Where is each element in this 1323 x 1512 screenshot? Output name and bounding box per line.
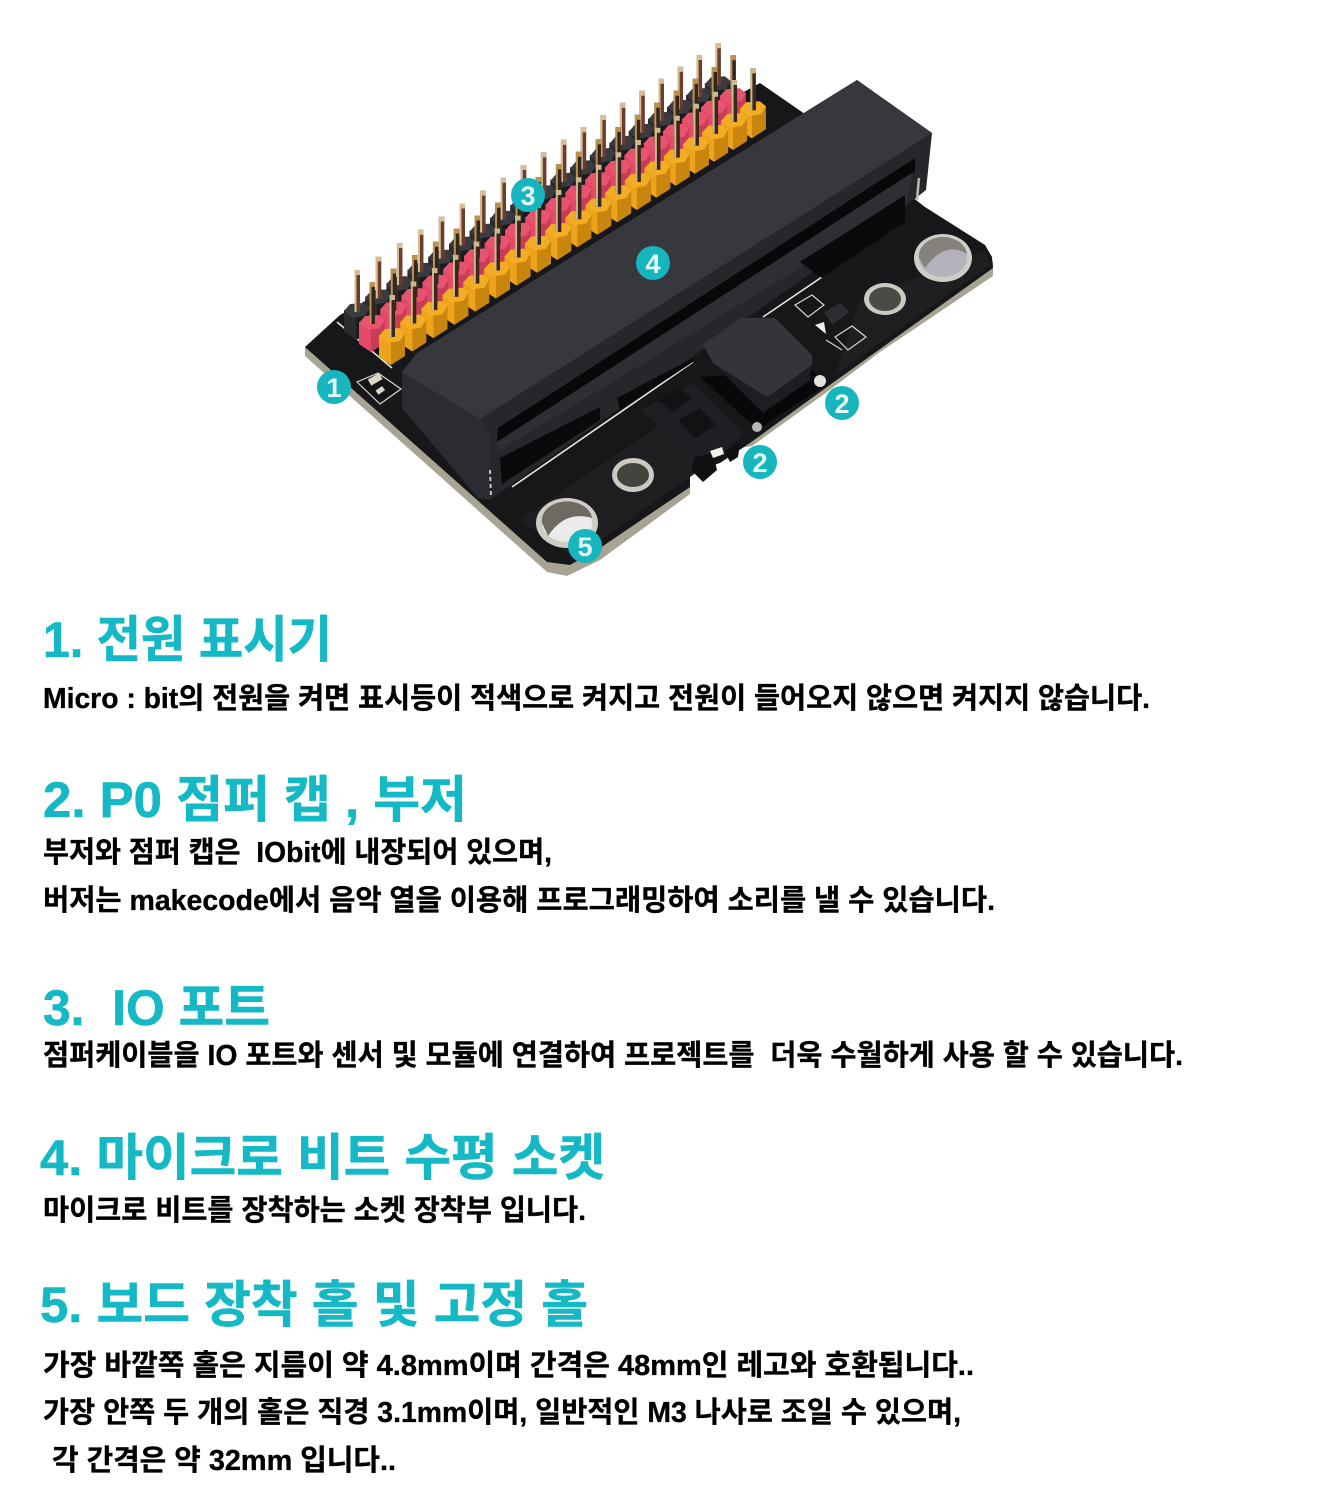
small hole: left	[612, 458, 654, 492]
text 1: Micro : bit의 전원을 켜면 표시등이 적색으로 켜지고 전원이 들어오지 않으면 켜지지 않습니다.	[43, 682, 1150, 715]
callout badge 2 buzzer: 2	[834, 389, 850, 419]
socket contact	[917, 178, 919, 200]
power indicator LED	[357, 373, 401, 404]
jumper cap	[640, 384, 744, 482]
heading 1: 1. 전원 표시기	[43, 612, 332, 668]
circuit board	[305, 83, 993, 565]
callout badge 3	[511, 178, 545, 212]
mounting hole: top right	[914, 234, 972, 282]
callout badge 1: 1	[326, 373, 342, 403]
socket end face	[402, 372, 490, 500]
heading 2: 2. P0 점퍼 캡 , 부저	[43, 772, 467, 828]
text 5 line 2: 가장 안쪽 두 개의 홀은 직경 3.1mm이며, 일반적인 M3 나사로 조일 수 있으며,	[43, 1396, 961, 1429]
callout badge 4: 4	[645, 249, 661, 279]
heading 3: 3. IO 포트	[43, 980, 270, 1036]
callout badge 5	[568, 529, 602, 563]
product photo: IO expansion board	[305, 43, 993, 576]
heading 4: 4. 마이크로 비트 수평 소켓	[40, 1130, 605, 1186]
buzzer	[700, 318, 827, 432]
text 5 line 3: 각 간격은 약 32mm 입니다..	[52, 1444, 396, 1477]
heading 5: 5. 보드 장착 홀 및 고정 홀	[40, 1277, 588, 1333]
text 4: 마이크로 비트를 장착하는 소켓 장착부 입니다.	[43, 1194, 586, 1227]
socket top face	[402, 80, 932, 419]
board edge	[305, 262, 993, 576]
socket slot	[497, 158, 915, 442]
socket	[402, 80, 932, 500]
black strips under lip	[500, 195, 905, 484]
callout badge 2 buzzer	[825, 386, 859, 420]
transistor markings	[795, 295, 866, 350]
black header row	[344, 43, 731, 340]
text 3: 점퍼케이블을 IO 포트와 센서 및 모듈에 연결하여 프로젝트를 더욱 수월하게 사용 할 수 있습니다.	[43, 1039, 1183, 1072]
small hole: right	[864, 283, 906, 315]
text 5 line 1: 가장 바깥쪽 홀은 지름이 약 4.8mm이며 간격은 48mm인 레고와 호환됩니다..	[43, 1349, 974, 1382]
callout badge 2 jumper	[743, 445, 777, 479]
header rows	[344, 43, 766, 365]
mounting hole: bottom	[536, 498, 598, 548]
callout badge 3: 3	[520, 181, 536, 211]
callout badge 5: 5	[577, 532, 593, 562]
callout badge 1	[317, 370, 351, 404]
silkscreen lines	[337, 222, 903, 487]
callout badge 4	[636, 246, 670, 280]
socket lip	[497, 172, 913, 452]
callout badge 2 jumper: 2	[752, 448, 768, 478]
red header row	[359, 55, 746, 352]
text 2 line 2: 버저는 makecode에서 음악 열을 이용해 프로그래밍하여 소리를 낼 수 있습니다.	[43, 884, 995, 917]
lighter board strip	[520, 250, 990, 555]
orange header row	[379, 68, 766, 365]
text 2 line 1: 부저와 점퍼 캡은 IObit에 내장되어 있으며,	[43, 836, 552, 869]
